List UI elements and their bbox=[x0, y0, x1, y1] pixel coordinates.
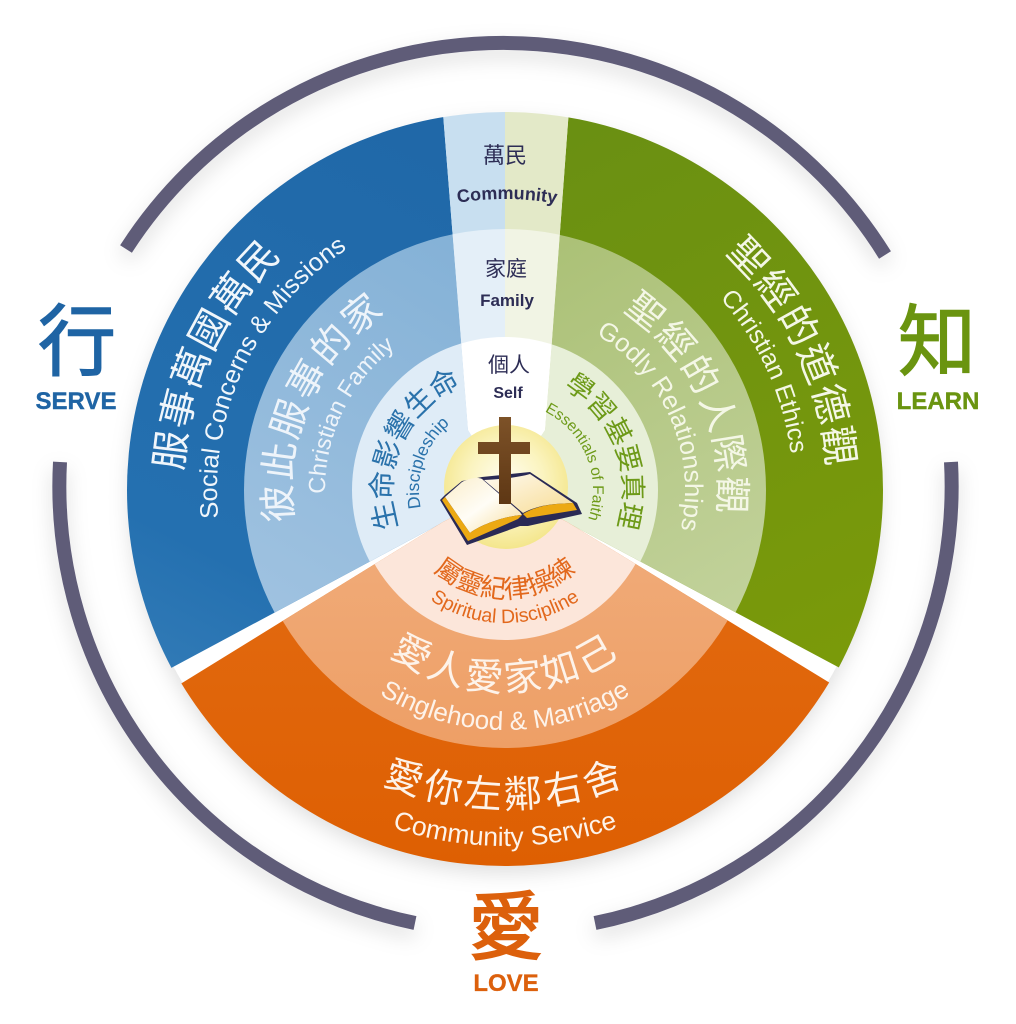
text: relationships en: Godly Relationships bbox=[600, 323, 704, 530]
text: community service zh: 愛你左鄰右舍 bbox=[384, 757, 618, 812]
serve texts bbox=[151, 240, 456, 529]
label: family zh: 家庭 bbox=[485, 253, 527, 283]
label: love: 愛 bbox=[469, 868, 543, 975]
text: essentials zh: 學習基要真理 bbox=[566, 372, 646, 530]
label: self en: Self bbox=[493, 385, 523, 402]
book left gold edge bbox=[442, 497, 522, 541]
label: learn: LEARN bbox=[897, 388, 979, 415]
column labels bbox=[458, 138, 558, 402]
label: family en: Family bbox=[480, 291, 534, 310]
soft disc under the wedges bbox=[129, 113, 881, 865]
arc: top bbox=[126, 43, 885, 255]
label: learn: 知 bbox=[898, 280, 976, 392]
love texts bbox=[382, 556, 628, 852]
sun disc bbox=[444, 425, 568, 549]
book back cover bbox=[440, 472, 582, 545]
panel: love wedge bbox=[181, 518, 830, 866]
label: serve: SERVE bbox=[36, 388, 116, 415]
label: serve: 行 bbox=[38, 280, 116, 392]
text: discipleship en: Discipleship bbox=[406, 419, 448, 508]
text: ethics en: Christian Ethics bbox=[724, 291, 804, 452]
panel: learn wedge bbox=[541, 117, 883, 668]
text: essentials en: Essentials of Faith bbox=[546, 402, 604, 520]
circular diagram bbox=[127, 110, 883, 868]
text: relationships zh: 聖經的人際觀 bbox=[623, 288, 750, 512]
arc: right bbox=[595, 462, 952, 923]
icon: sun, cross and open book bbox=[440, 417, 582, 549]
arc: left bbox=[59, 462, 415, 923]
text: community service en: Community Service bbox=[395, 812, 616, 852]
panel: centre column left bbox=[443, 112, 505, 436]
text: christian family zh: 彼此服事的家 bbox=[259, 292, 383, 522]
text: discipleship zh: 生命影響生命 bbox=[368, 370, 456, 529]
label: community en: Community bbox=[458, 188, 558, 206]
panel: centre column right bbox=[505, 112, 568, 436]
book right gold edge bbox=[523, 503, 577, 518]
label: self zh: 個人 bbox=[488, 349, 530, 379]
learn texts bbox=[546, 232, 858, 530]
text: social concerns en: Social Concerns & Missions bbox=[199, 240, 346, 518]
label: community zh: 萬民 bbox=[483, 138, 527, 170]
text: ethics zh: 聖經的道德觀 bbox=[725, 232, 858, 465]
book right pages bbox=[484, 474, 573, 513]
text: discipline en: Spiritual Discipline bbox=[432, 590, 578, 624]
panel: serve wedge bbox=[127, 117, 472, 668]
cross bbox=[478, 417, 530, 504]
text: social concerns zh: 服事萬國萬民 bbox=[151, 240, 280, 470]
text: christian family en: Christian Family bbox=[308, 338, 392, 492]
book left pages bbox=[445, 478, 522, 533]
text: singlehood zh: 愛人愛家如己 bbox=[390, 632, 616, 694]
label: love: LOVE bbox=[473, 970, 539, 997]
text: discipline zh: 屬靈紀律操練 bbox=[433, 556, 576, 600]
text: singlehood en: Singlehood & Marriage bbox=[382, 682, 628, 730]
outer ring arcs bbox=[59, 43, 952, 923]
